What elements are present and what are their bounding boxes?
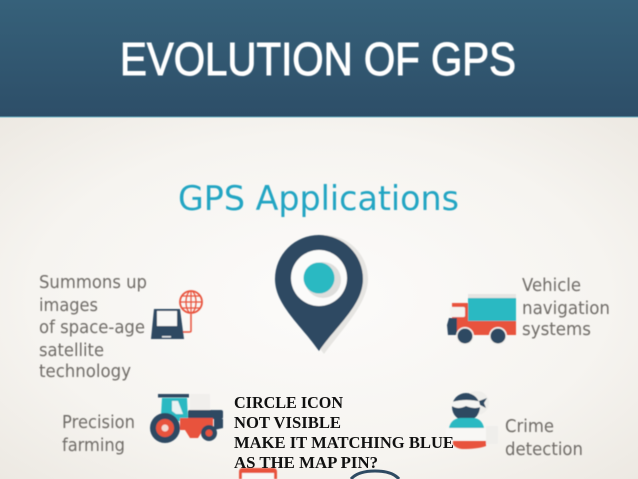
- text: crime detection: detection: [505, 439, 583, 460]
- review note: MAKE IT MATCHING BLUE: [234, 433, 454, 452]
- heading: GPS Applications: GPS Applications: [178, 179, 459, 219]
- text: vehicle navigation systems: navigation: [522, 298, 610, 319]
- icon: partial red device: [239, 468, 277, 479]
- text: vehicle navigation systems: [522, 275, 610, 340]
- icon: map pin: [275, 235, 368, 354]
- icon: truck: [447, 294, 516, 345]
- review note: NOT VISIBLE: [234, 413, 341, 432]
- text: precision farming: Precision: [62, 412, 135, 433]
- text: crime detection: Crime: [505, 416, 554, 437]
- title: EVOLUTION OF GPS: [120, 33, 516, 85]
- text: vehicle navigation systems: systems: [522, 319, 591, 340]
- text: satellite technology: Summons up: [39, 272, 147, 293]
- text: satellite technology: [39, 272, 147, 382]
- text: vehicle navigation systems: Vehicle: [522, 275, 581, 296]
- review note: AS THE MAP PIN?: [234, 453, 378, 472]
- text: satellite technology: satellite: [39, 340, 104, 361]
- text: crime detection: [505, 416, 583, 460]
- text: satellite technology: technology: [39, 361, 131, 382]
- icon: burglar: [446, 391, 498, 449]
- icon: tractor: [150, 394, 223, 443]
- icon: laptop and globe: [151, 291, 202, 339]
- text: satellite technology: of space-age: [39, 317, 145, 338]
- header banner: [0, 0, 638, 118]
- text: precision farming: farming: [62, 435, 125, 456]
- review note: CIRCLE ICON: [234, 393, 343, 412]
- review note: [234, 393, 454, 472]
- text: satellite technology: images: [39, 295, 98, 316]
- icon: partial dark circle: [351, 471, 399, 479]
- text: precision farming: [62, 412, 135, 456]
- background: [0, 117, 638, 479]
